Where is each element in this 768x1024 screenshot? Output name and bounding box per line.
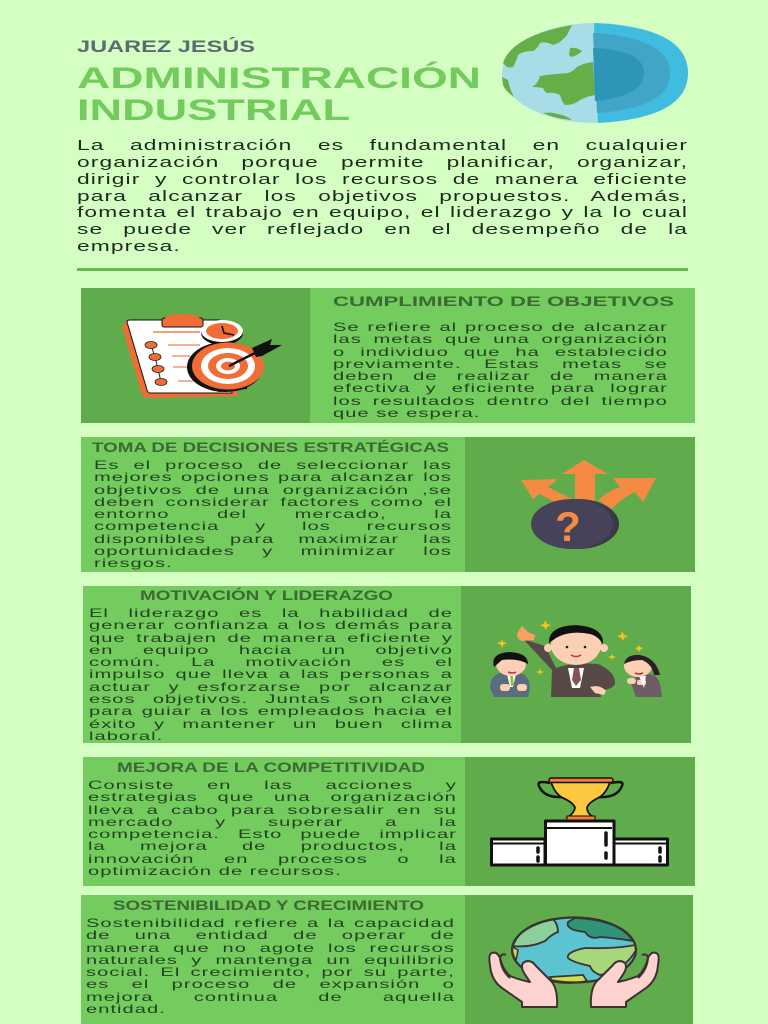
panel: sostenibilidad y crecimiento <box>81 895 693 1024</box>
text block: laboral. <box>89 729 163 743</box>
panel: toma de decisiones <box>81 437 695 572</box>
title <box>77 61 481 127</box>
intro paragraph: para alcanzar los objetivos propuestos. Además, <box>77 188 688 205</box>
text block: optimización de recursos. <box>88 864 342 878</box>
intro paragraph <box>77 137 688 255</box>
text block <box>86 916 455 1016</box>
heading: TOMA DE DECISIONES ESTRATÉGICAS <box>92 440 449 455</box>
text block <box>89 606 453 743</box>
text block: impulso que lleva a las personas a <box>89 667 453 681</box>
author name: JUAREZ JESÚS <box>77 37 255 56</box>
text block <box>88 778 457 878</box>
text block: la mejora de productos, la <box>88 839 457 853</box>
heading: MEJORA DE LA COMPETITIVIDAD <box>117 760 425 775</box>
panel: mejora de la competitividad <box>83 757 695 886</box>
text block <box>333 320 668 420</box>
intro paragraph: La administración es fundamental en cualquier <box>77 137 688 154</box>
intro paragraph: organización porque permite planificar, organizar, <box>77 154 688 171</box>
text block: mercado y superar a la <box>88 815 457 829</box>
panel: cumplimiento de objetivos <box>81 288 695 423</box>
icon: hands holding globe <box>488 916 660 1008</box>
text block: entidad. <box>86 1002 166 1016</box>
heading: MOTIVACIÓN Y LIDERAZGO <box>140 588 393 603</box>
text block: que trabajen de manera eficiente y <box>89 631 453 645</box>
intro paragraph: fomenta el trabajo en equipo, el liderazgo y la lo cual <box>77 204 688 221</box>
text block: deben de realizar de manera <box>333 369 668 383</box>
text block: disponibles para maximizar las <box>94 532 452 546</box>
text block: deben considerar factores como el <box>94 495 452 509</box>
text block: innovación en procesos o la <box>88 852 457 866</box>
intro paragraph: empresa. <box>77 238 181 255</box>
text block: actuar y esforzarse por alcanzar <box>89 680 453 694</box>
text block: naturales y mantenga un equilibrio <box>86 953 455 967</box>
text block: oportunidades y minimizar los <box>94 544 452 558</box>
text block: entorno del mercado, la <box>94 507 452 521</box>
icon: arrows and question mark: ? <box>555 503 581 550</box>
text block: efectiva y eficiente para lograr <box>333 381 668 395</box>
text block: estrategias que una organización <box>88 790 457 804</box>
title: ADMINISTRACIÓN <box>77 61 481 95</box>
text block: éxito y mantener un buen clima <box>89 717 453 731</box>
text block: de una entidad de operar de <box>86 928 455 942</box>
text block: mejores opciones para alcanzar los <box>94 470 452 484</box>
title: INDUSTRIAL <box>77 94 350 127</box>
text block: es el proceso de expansión o <box>86 977 455 991</box>
intro paragraph: dirigir y controlar los recursos de manera eficiente <box>77 171 688 188</box>
icon: trophy on podium <box>490 777 669 866</box>
text block: que se espera. <box>333 406 480 420</box>
icon: arrows and question mark <box>521 460 656 550</box>
intro paragraph: se puede ver reflejado en el desempeño de la <box>77 221 688 238</box>
text block: objetivos de una organización ,se <box>94 483 452 497</box>
text block: mejora continua de aquella <box>86 990 455 1004</box>
text block: común. La motivación es el <box>89 655 453 669</box>
text block: para guiar a los empleados hacia el <box>89 704 453 718</box>
icon: earth cross-section globe <box>502 23 688 123</box>
text block: social. El crecimiento, por su parte, <box>86 965 455 979</box>
text block: lleva a cabo para sobresalir en su <box>88 803 457 817</box>
text block: esos objetivos. Juntas son clave <box>89 692 453 706</box>
text block: en equipo hacia un objetivo <box>89 643 453 657</box>
heading: SOSTENIBILIDAD Y CRECIMIENTO <box>113 898 424 913</box>
text block: previamente. Estas metas se <box>333 357 668 371</box>
text block: Consiste en las acciones y <box>88 778 457 792</box>
icon: boss and cheering employees <box>490 620 662 697</box>
text block: El liderazgo es la habilidad de <box>89 606 453 620</box>
heading: CUMPLIMIENTO DE OBJETIVOS <box>333 293 674 309</box>
text block: Se refiere al proceso de alcanzar <box>333 320 668 334</box>
text block: generar confianza a los demás para <box>89 618 453 632</box>
text block: competencia y los recursos <box>94 519 452 533</box>
text block: los resultados dentro del tiempo <box>333 394 668 408</box>
text block: competencia. Esto puede implicar <box>88 827 457 841</box>
text block <box>94 458 452 570</box>
text block: manera que no agote los recursos <box>86 941 455 955</box>
text block: las metas que una organización <box>333 332 668 346</box>
panel: motivación y liderazgo <box>83 586 691 743</box>
text block: Sostenibilidad refiere a la capacidad <box>86 916 455 930</box>
icon: clipboard and target <box>122 314 282 398</box>
text block: o individuo que ha establecido <box>333 345 668 359</box>
text block: Es el proceso de seleccionar las <box>94 458 452 472</box>
text block: riesgos. <box>94 556 173 570</box>
